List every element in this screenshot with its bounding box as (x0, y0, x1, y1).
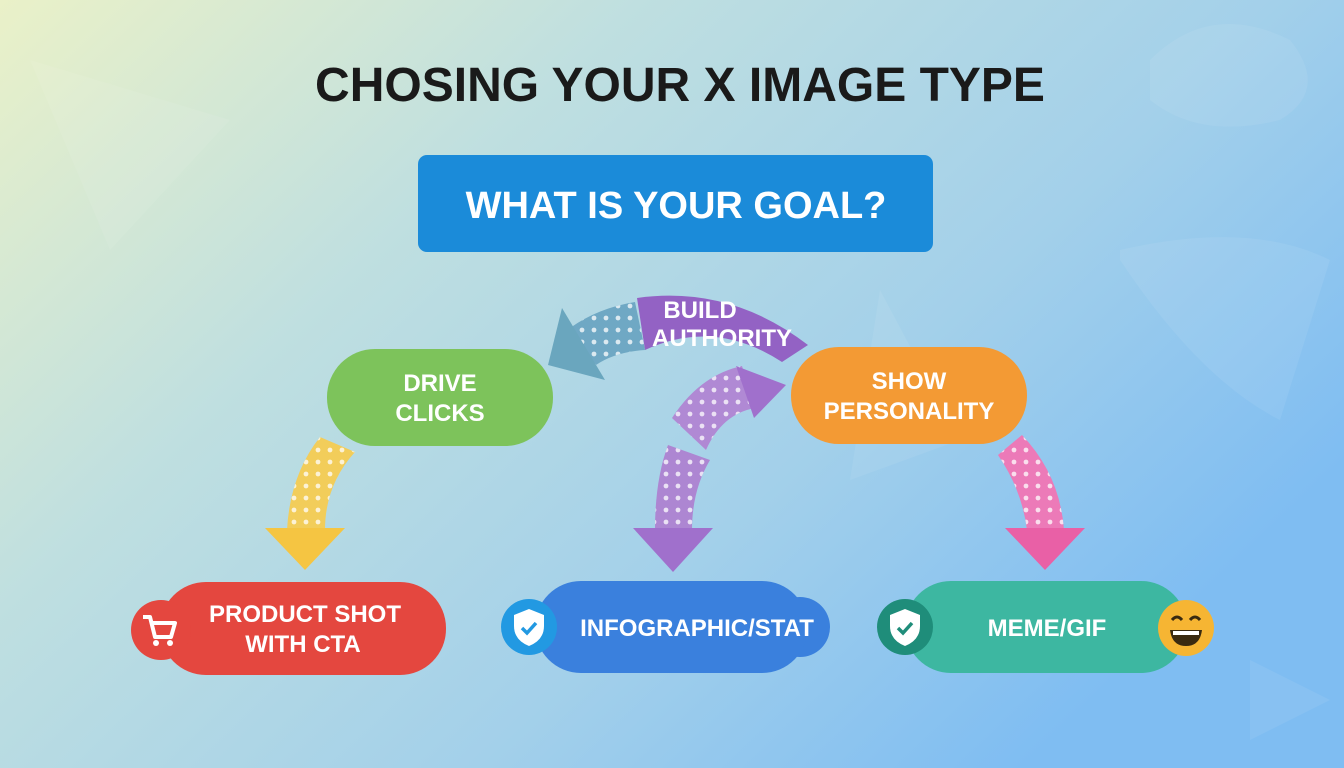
arrow: yellow to product shot (265, 437, 355, 570)
arrow: purple down to infographic (633, 445, 713, 572)
icon: cart (131, 600, 191, 660)
icon: emoji (1158, 600, 1214, 656)
node: show personality (791, 347, 1027, 444)
outcome: meme (877, 581, 1214, 673)
arrow: purple up to show personality (672, 366, 786, 450)
node: drive clicks: CLICKS (395, 400, 485, 427)
arrow: pink to meme (998, 435, 1085, 570)
arrow: build authority: AUTHORITY (652, 325, 792, 352)
title: CHOSING YOUR X IMAGE TYPE (315, 59, 1045, 112)
node: show personality: PERSONALITY (824, 398, 994, 425)
outcome: meme: MEME/GIF (988, 615, 1106, 642)
outcome: product shot (131, 582, 446, 675)
node: show personality: SHOW (872, 368, 947, 395)
outcome: product shot: PRODUCT SHOT (209, 601, 401, 628)
arrow: build authority: BUILD (663, 297, 737, 324)
goal box (418, 155, 933, 252)
goal box: WHAT IS YOUR GOAL? (466, 185, 886, 227)
node: drive clicks: DRIVE (403, 370, 477, 397)
outcome: product shot: WITH CTA (245, 631, 361, 658)
outcome: infographic (501, 581, 830, 673)
node: drive clicks (327, 349, 553, 446)
icon: shield dark (877, 599, 933, 655)
arrow: teal to drive clicks (548, 302, 645, 380)
icon: shield (501, 599, 557, 655)
outcome: infographic: INFOGRAPHIC/STAT (580, 615, 814, 642)
arrow: build authority (637, 296, 808, 362)
